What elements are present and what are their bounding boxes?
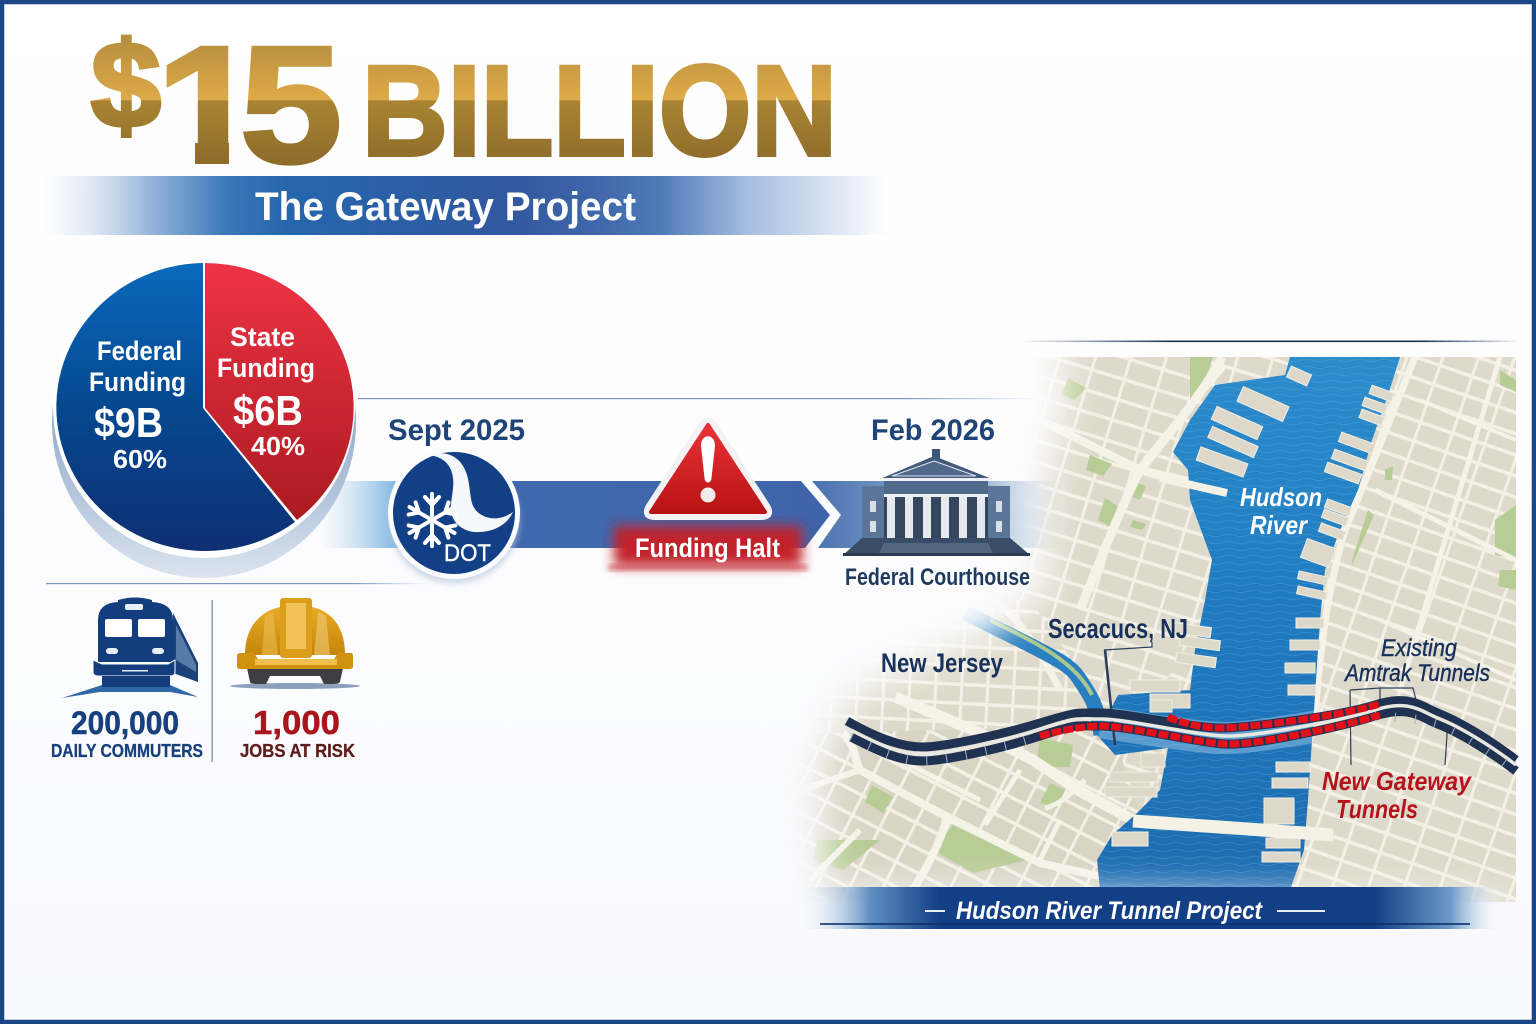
federal funding label: Funding [89,367,186,397]
title: $15 Billion [90,34,831,166]
piers [1105,366,1395,862]
map label: Existing Amtrak Tunnels: Amtrak Tunnels [1343,660,1490,687]
map label: New Jersey: New Jersey [881,648,1003,678]
stat: daily commuters [51,598,203,761]
map top rule [1020,340,1520,342]
hudson river tunnel map [760,357,1516,902]
federal funding slice [56,263,295,551]
federal funding label: Federal [97,336,182,366]
river [1097,357,1400,890]
stat: jobs at risk: 1,000 [253,704,340,741]
banner rules [925,910,945,912]
map label: Existing Amtrak Tunnels [1343,635,1490,687]
snowflake [406,494,458,546]
funding halt banner [608,418,808,570]
map label: Hudson River [1240,482,1322,540]
title: $15 Billion: 1 [156,13,261,198]
icon: hard hat [230,598,360,689]
icon: warning triangle [644,418,772,520]
icon: federal courthouse [843,449,1030,556]
map bottom banner: Hudson River Tunnel Project [956,897,1263,925]
pie chart: funding split [52,256,356,578]
title: $15 Billion: 5 [240,13,342,198]
DOT label: DOT [444,540,491,567]
title: $15 Billion: $ [91,17,161,153]
leader lines [1104,642,1448,765]
tunnel routes [847,642,1516,771]
swoosh [428,453,513,532]
new gateway tunnels [1040,715,1380,744]
date: Feb 2026: Feb 2026 [871,414,995,447]
federal funding label [89,336,186,474]
divider rule timeline top [358,398,1038,399]
subtitle banner: The Gateway Project [40,176,890,235]
map diagonal channel [965,613,1101,735]
map label: Hudson River: River [1250,510,1309,540]
map bottom banner [800,887,1500,929]
title: $15 Billion: BILLION [362,40,837,183]
tunnel tick marks [851,736,1040,761]
stat: daily commuters: 200,000 [71,705,179,741]
map label: New Gateway Tunnels: Tunnels [1336,794,1418,824]
subtitle banner: The Gateway Project: The Gateway Project [255,185,636,229]
stat divider [212,600,213,762]
funding halt banner: Funding Halt [635,533,780,563]
existing amtrak tunnels [847,701,1516,760]
map label: Secacucs, NJ: Secacucs, NJ [1048,613,1188,644]
map label: Existing Amtrak Tunnels: Existing [1381,635,1458,662]
state funding label: 40% [251,431,305,461]
map label: Hudson River: Hudson [1240,482,1322,512]
map major roads [800,357,1516,890]
timeline arrow band [318,481,1060,548]
divider rule under pie [46,583,426,584]
state funding label: $6B [233,387,303,434]
map west blocks [1021,357,1290,754]
state funding label: State [230,322,295,352]
stat: jobs at risk [230,598,360,761]
federal funding label: $9B [94,399,163,446]
icon: train [62,598,198,698]
label: Federal Courthouse: Federal Courthouse [845,564,1030,591]
stat: jobs at risk: JOBS AT RISK [240,741,355,761]
state funding label [217,322,315,461]
date: Sept 2025: Sept 2025 [388,414,525,447]
tunnel glow on river [1101,712,1375,738]
map label: New Gateway Tunnels: New Gateway [1322,766,1472,796]
map parks [813,357,1516,873]
map label: New Gateway Tunnels [1322,766,1472,824]
bridge across river [1133,478,1333,835]
icon: DOT seal [388,447,520,584]
federal funding label: 60% [113,444,167,474]
state funding label: Funding [217,353,315,383]
stat: daily commuters: DAILY COMMUTERS [51,741,203,761]
state funding slice [205,263,354,520]
